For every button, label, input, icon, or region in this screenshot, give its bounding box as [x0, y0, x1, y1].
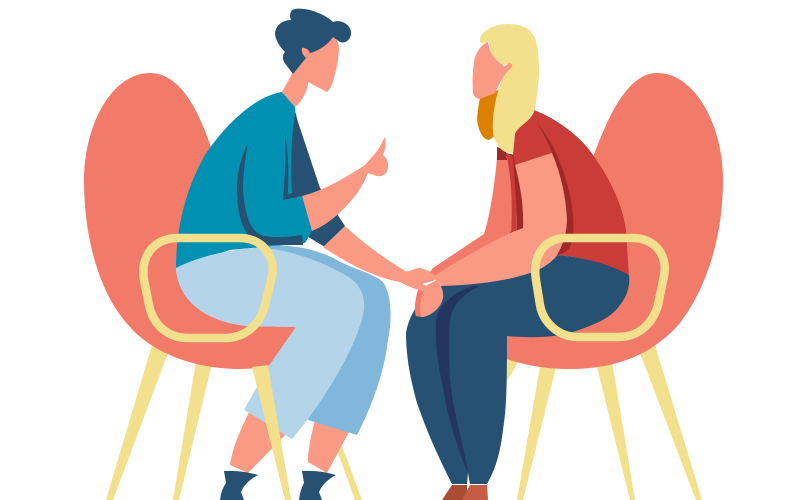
- inner shirt strip: [506, 153, 524, 240]
- shirt fold: [537, 123, 573, 255]
- sleeve cap: [513, 122, 552, 165]
- trouser stripe: [436, 286, 480, 473]
- left chair seat: [84, 73, 296, 369]
- shirt: [176, 92, 312, 268]
- shoes: [442, 485, 467, 500]
- hair blonde: [480, 24, 539, 153]
- trousers front: [176, 248, 364, 439]
- left person lower legs: [230, 410, 288, 473]
- hair: [275, 9, 351, 74]
- shirt: [513, 110, 629, 277]
- sleeve and arm: [433, 153, 567, 286]
- left person: [176, 9, 407, 500]
- shirt dark band: [497, 147, 507, 160]
- left chair legs: [106, 335, 362, 500]
- right chair seat: [507, 73, 723, 369]
- boots: [220, 471, 258, 500]
- front chair leg left: [252, 365, 291, 500]
- hand on knee: [415, 280, 443, 317]
- raised arm and hand: [302, 137, 388, 231]
- torso: [430, 158, 515, 279]
- shirt folds: [237, 143, 303, 245]
- left chair arm ring: [143, 238, 273, 338]
- back arm sleeve: [295, 110, 345, 247]
- ear: [302, 48, 310, 58]
- holding hand: [400, 268, 437, 292]
- orange hair: [477, 90, 498, 140]
- right chair legs: [505, 335, 702, 500]
- neck and face: [282, 37, 339, 107]
- reaching arm: [323, 226, 407, 282]
- trousers back: [253, 245, 391, 435]
- right chair arm ring: [535, 238, 665, 337]
- right person: [400, 24, 629, 500]
- face: [473, 42, 512, 99]
- trousers: [406, 255, 629, 484]
